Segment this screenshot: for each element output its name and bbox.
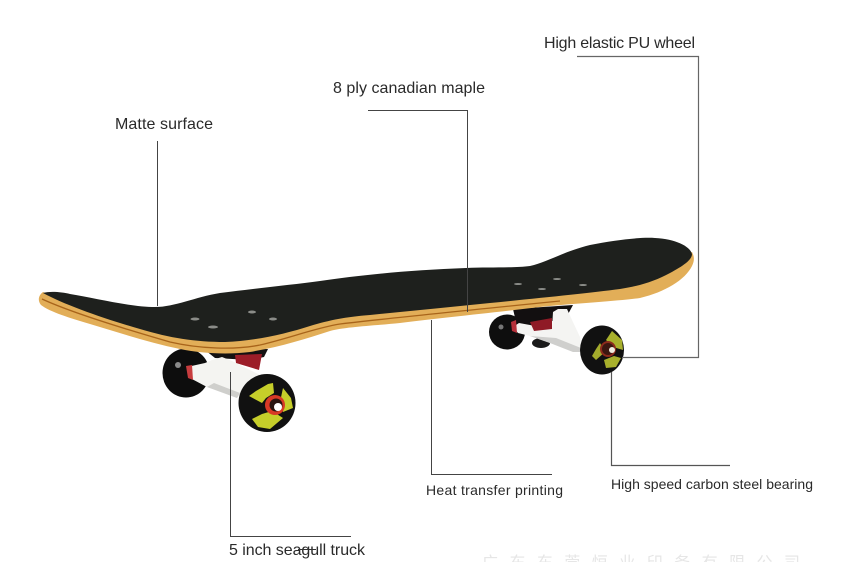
deck bolts (190, 278, 587, 328)
wood ply stripe (42, 299, 560, 348)
label: 5 inch seagull truck: 5 inch seagull truck (229, 542, 366, 559)
label: high speed carbon steel bearing: High speed carbon steel bearing (611, 476, 813, 492)
label: heat transfer printing: Heat transfer printing (426, 482, 563, 498)
label: matte surface: Matte surface (115, 116, 213, 133)
icon: front truck (186, 349, 268, 398)
leader line: matte surface (156, 141, 158, 306)
strike mark on seagull label (298, 548, 316, 550)
icon: back truck (511, 305, 582, 352)
leader line: high elastic PU wheel (577, 56, 698, 358)
icon: near back wheel (580, 326, 624, 374)
icon: far back wheel (489, 314, 525, 350)
black grip surface (43, 238, 692, 342)
label: high elastic PU wheel: High elastic PU wheel (544, 35, 695, 52)
leader line: high speed bearing (612, 372, 730, 466)
icon: near front wheel (238, 374, 296, 432)
leader line: seagull truck (230, 372, 351, 536)
wood edge of deck (39, 252, 694, 353)
icon: front far wheel (162, 348, 210, 398)
leader line: 8 ply canadian maple (368, 110, 468, 312)
leader line: heat transfer printing (432, 320, 552, 474)
label: 8 ply canadian maple: 8 ply canadian maple (333, 80, 485, 97)
skateboard deck (39, 238, 694, 353)
